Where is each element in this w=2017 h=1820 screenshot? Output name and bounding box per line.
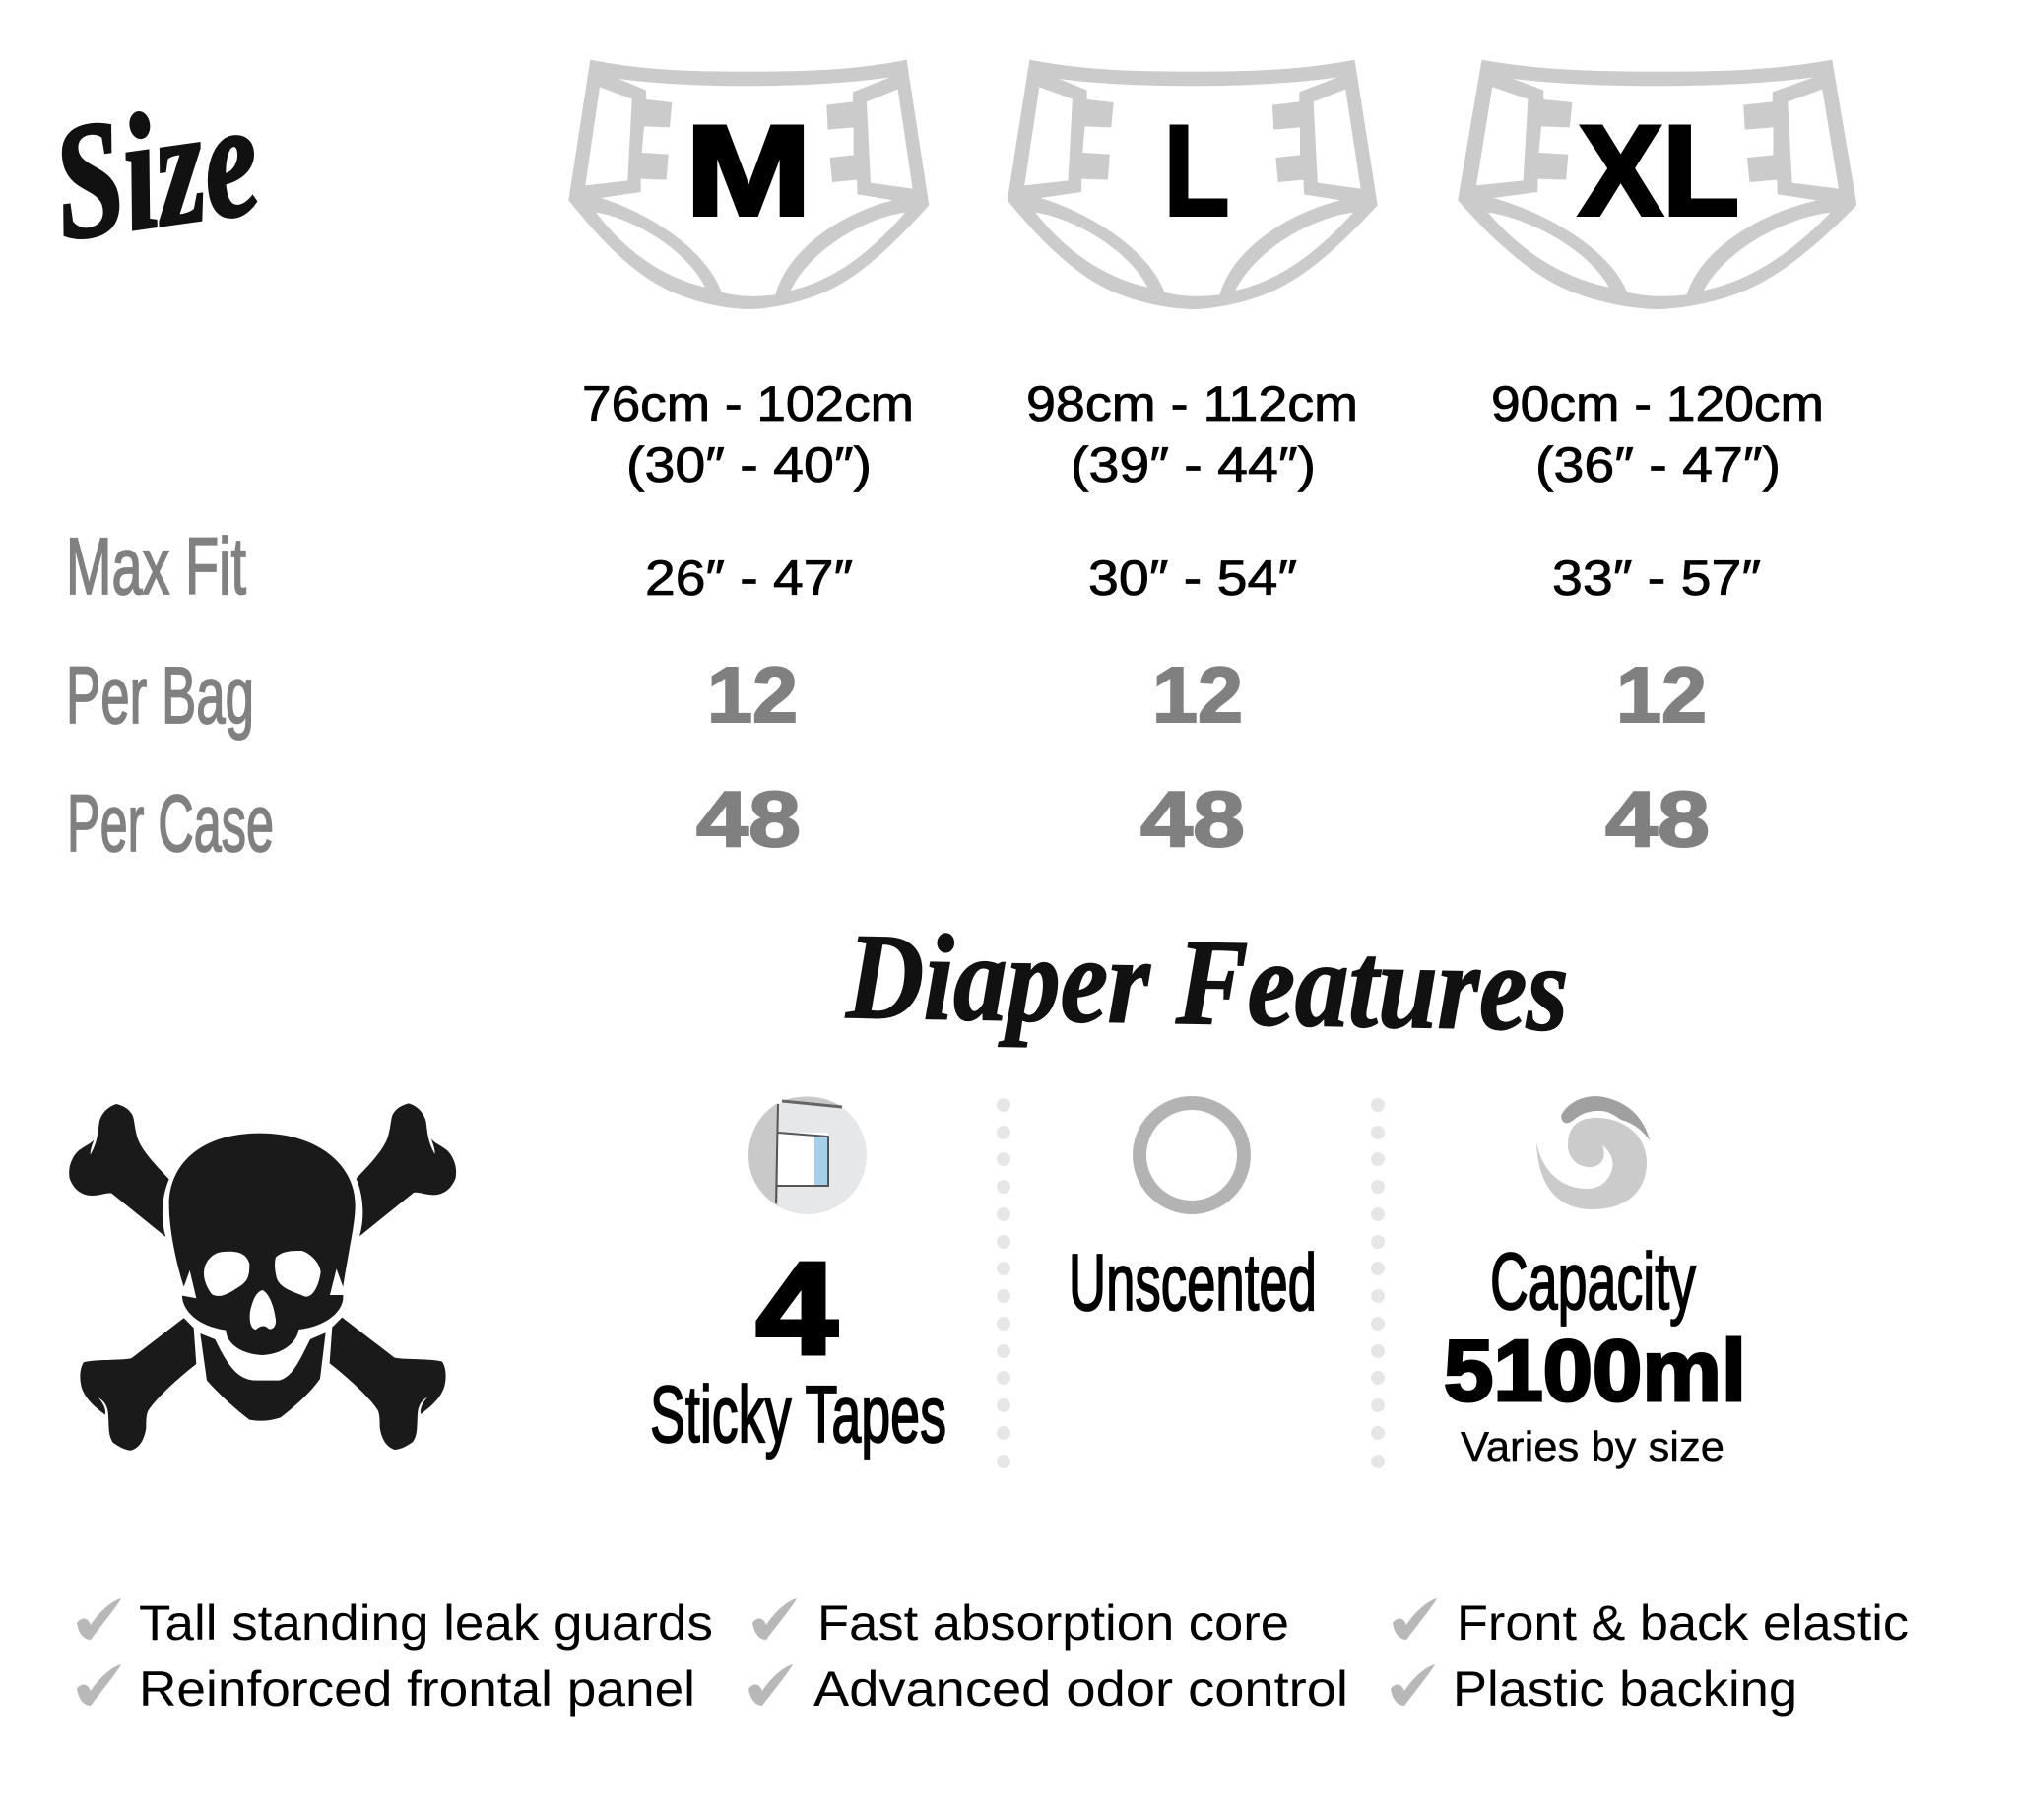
icon: sticky tape xyxy=(748,1096,867,1214)
waist range: M: 76cm - 102cm xyxy=(582,376,914,431)
text: odor control: Advanced odor control xyxy=(813,1661,1348,1717)
icon: ring xyxy=(1139,1103,1244,1207)
size letter L: L xyxy=(1164,98,1229,242)
number 4: 4 xyxy=(756,1236,837,1381)
feature: unscented xyxy=(1069,1103,1317,1328)
label: Capacity: Capacity xyxy=(1490,1237,1696,1327)
check: elastic xyxy=(1393,1598,1437,1640)
waist range: M xyxy=(582,376,914,492)
heading: Diaper Features: Diaper Features xyxy=(845,909,1570,1058)
max fit values: 33″ - 57″ xyxy=(1552,551,1761,606)
per bag values: 12 xyxy=(1616,651,1707,739)
dotted divider 2 xyxy=(1371,1098,1385,1468)
note: Varies by size: Varies by size xyxy=(1461,1423,1724,1469)
skull jaw xyxy=(200,1332,326,1421)
icon: diaper L outline xyxy=(1008,60,1378,309)
check: frontal panel xyxy=(77,1664,121,1706)
max fit values: 26″ - 47″ xyxy=(645,551,853,606)
check: absorption core xyxy=(752,1598,797,1640)
icon: diaper XL outline xyxy=(1458,60,1856,309)
per bag values: 12 xyxy=(1152,651,1243,739)
per case values xyxy=(696,775,1710,863)
text: elastic: Front & back elastic xyxy=(1457,1595,1909,1651)
label: Unscented: Unscented xyxy=(1069,1238,1317,1328)
row label: Per Case: Per Case xyxy=(67,779,274,869)
size letter M: M xyxy=(685,98,812,242)
feature: 4 sticky tapes xyxy=(650,1096,946,1460)
diaper size L xyxy=(1008,60,1378,309)
bone: top right xyxy=(357,1103,456,1236)
text: frontal panel: Reinforced frontal panel xyxy=(139,1661,695,1717)
per bag values xyxy=(707,651,1707,739)
icon: skull and crossbones xyxy=(69,1103,456,1451)
checklist column 1 xyxy=(77,1595,713,1717)
heading: Size: Size xyxy=(42,66,269,276)
checklist column 3 xyxy=(1391,1595,1909,1717)
diaper size XL xyxy=(1458,60,1856,309)
row label: Per Bag: Per Bag xyxy=(66,651,254,741)
bone: bottom left xyxy=(80,1318,196,1451)
size letters XL: XL xyxy=(1579,98,1739,242)
check: plastic backing xyxy=(1391,1664,1435,1706)
skull cranium xyxy=(169,1134,356,1355)
waist range: XL: 90cm - 120cm xyxy=(1491,376,1824,431)
text: leak guards: Tall standing leak guards xyxy=(139,1595,713,1651)
max fit values xyxy=(645,551,1761,606)
waist range: M: (30″ - 40″) xyxy=(626,437,872,492)
per bag values: 12 xyxy=(707,651,798,739)
waist range: L: 98cm - 112cm xyxy=(1026,376,1358,431)
waist range: L xyxy=(1026,376,1358,492)
icon: diaper M outline xyxy=(568,60,929,309)
per case values: 48 xyxy=(1140,775,1245,863)
checklist column 2 xyxy=(748,1595,1348,1717)
check: leak guards xyxy=(77,1598,121,1640)
dotted divider 1 xyxy=(997,1098,1010,1468)
max fit values: 30″ - 54″ xyxy=(1088,551,1297,606)
bone: top left xyxy=(69,1104,169,1237)
text: absorption core: Fast absorption core xyxy=(817,1595,1289,1651)
feature: capacity xyxy=(1444,1096,1746,1469)
row label: Max Fit: Max Fit xyxy=(66,522,246,612)
check: odor control xyxy=(748,1664,793,1706)
bone: bottom right xyxy=(330,1318,446,1450)
per case values: 48 xyxy=(696,775,801,863)
icon: swirl xyxy=(1536,1096,1650,1209)
per case values: 48 xyxy=(1605,775,1710,863)
label: Sticky Tapes: Sticky Tapes xyxy=(650,1370,946,1460)
waist range: XL: (36″ - 47″) xyxy=(1535,437,1781,492)
waist range: XL xyxy=(1491,376,1824,492)
value: 5100ml: 5100ml xyxy=(1444,1322,1746,1419)
waist range: L: (39″ - 44″) xyxy=(1071,437,1316,492)
text: plastic backing: Plastic backing xyxy=(1453,1661,1797,1717)
diaper size M xyxy=(568,60,929,309)
